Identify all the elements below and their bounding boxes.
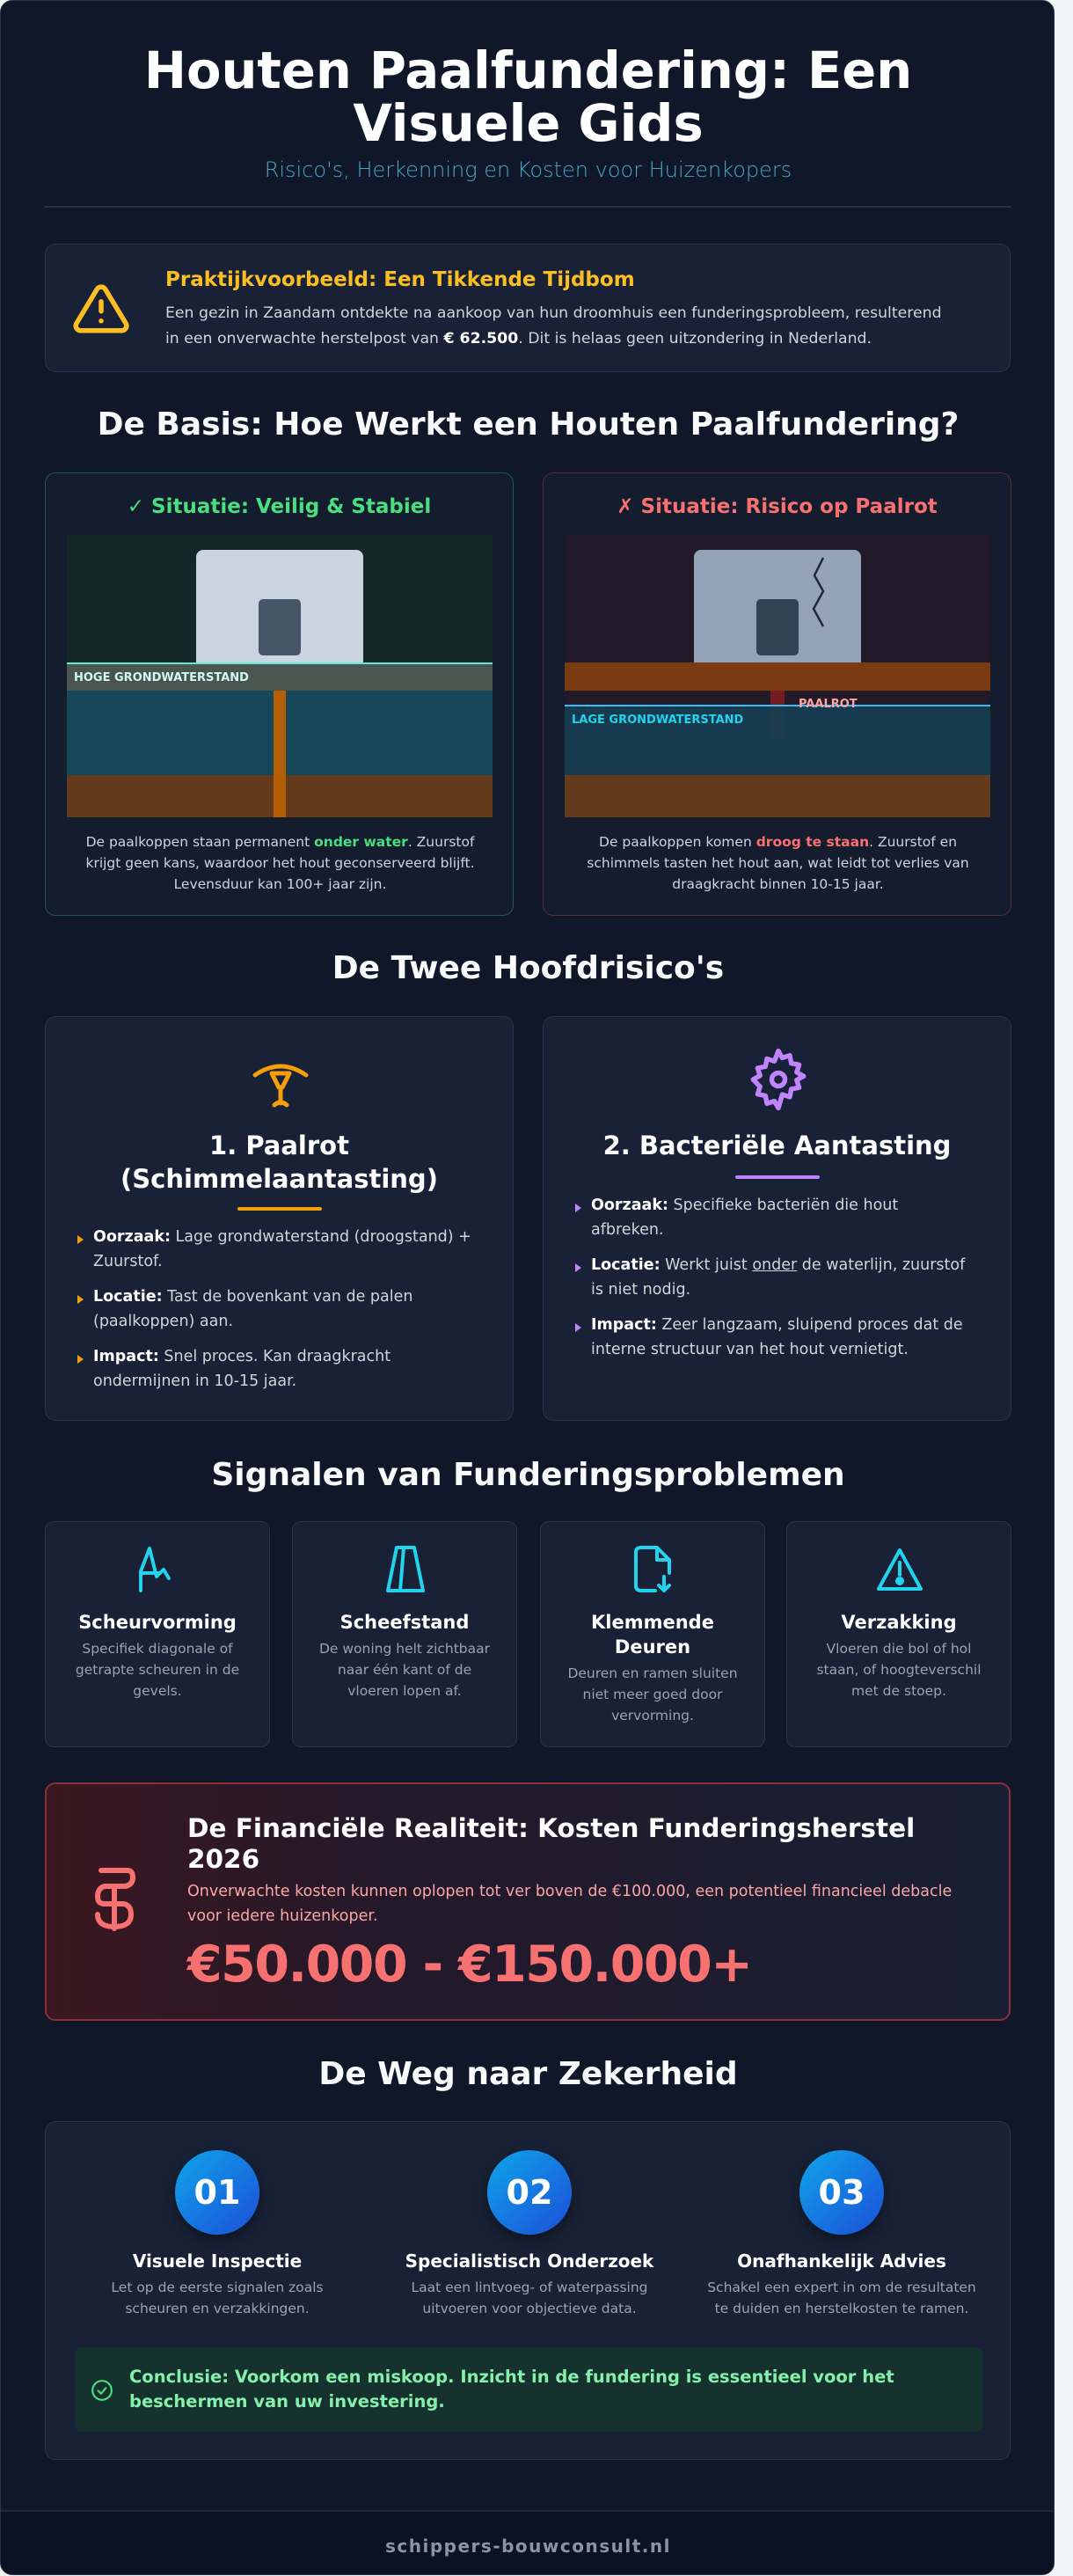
step 1: scheuren en verzakkingen. [125,2301,310,2316]
panel: stappen [45,2121,1011,2460]
step 2 [405,2150,654,2316]
caption: De paalkoppen komen droog te staan. Zuurstof en schimmels tasten het hout aan, wat leidt tot verlies van draagkracht binnen 10-15 jaar. [587,834,969,892]
panel title: ✗ Situatie: Risico op Paalrot [617,495,938,518]
title: Visuele Gids [353,94,704,153]
illustration: high groundwater [67,535,493,817]
callout text [165,304,942,348]
icon: money [95,1868,135,1931]
panel: paalrot [45,1016,514,1421]
step 1: Visuele Inspectie [133,2250,302,2272]
bullet list: Impact: Snel proces. Kan draagkracht ondermijnen in 10-15 jaar. [93,1348,391,1390]
icon: door file [634,1546,672,1592]
financial text: Onverwachte kosten kunnen oplopen tot ver boven de €100.000, een potentieel financieel debacle voor iedere huizenkoper. [187,1883,952,1925]
signal card: scheefstand [292,1521,517,1747]
icon: check [91,2380,113,2401]
signal card: verzakking: Vloeren die bol of hol staan, of hoogteverschil met de stoep. [816,1641,982,1699]
icon: crack [139,1547,171,1592]
conclusion [75,2347,982,2432]
bullet list: Locatie: Tast de bovenkant van de palen (paalkoppen) aan. [93,1288,412,1330]
callout title: Praktijkvoorbeeld: Een Tikkende Tijdbom [165,268,635,291]
caption: De paalkoppen staan permanent onder water. Zuurstof krijgt geen kans, waardoor het hout geconserveerd blijft. Levensduur kan 100+ jaar zijn. [85,834,475,892]
risk title: 1. Paalrot [209,1131,349,1160]
step 1 [111,2150,324,2316]
signal card: scheurvorming: Specifiek diagonale of getrapte scheuren in de gevels. [76,1641,239,1699]
icon: tilted [386,1546,425,1592]
conclusion: Conclusie: Voorkom een miskoop. Inzicht in de fundering is essentieel voor het beschermen van uw investering. [129,2367,894,2411]
signal card: verzakking: Verzakking [841,1612,957,1633]
footer [1,2510,1055,2576]
title: Houten Paalfundering: Een [144,41,912,100]
step 2: 02 [507,2173,552,2212]
bullet list [77,1228,471,1390]
title [144,41,912,153]
footer: schippers-bouwconsult.nl [385,2536,671,2557]
illustration: low groundwater: PAALROT [799,698,858,711]
bullet list: afbreken. [591,1221,664,1239]
callout: praktijkvoorbeeld [45,244,1011,372]
bullet list: Impact: Zeer langzaam, sluipend proces dat de interne structuur van het hout vernietigt. [591,1316,963,1358]
illustration: low groundwater [565,535,990,817]
step 1: Let op de eerste signalen zoals [111,2280,324,2295]
illustration: high groundwater: HOGE GRONDWATERSTAND [74,671,249,684]
subtitle: Risico's, Herkenning en Kosten voor Huizenkopers [265,157,792,182]
bullet list: Oorzaak: Lage grondwaterstand (droogstand) + Zuurstof. [93,1228,471,1270]
risk title: 2. Bacteriële Aantasting [603,1131,951,1160]
signal card: klemmende deuren: Deuren [615,1636,690,1658]
callout text: Een gezin in Zaandam ontdekte na aankoop van hun droomhuis een funderingsprobleem, resulterend [165,304,942,322]
signal card: klemmende deuren: Klemmende [591,1612,714,1633]
icon: warning [877,1548,923,1591]
signal card: verzakking [786,1521,1011,1747]
risk title: (Schimmelaantasting) [120,1164,438,1194]
bullet list: Oorzaak: Specifieke bacteriën die hout [591,1197,898,1214]
bullet list [575,1197,966,1358]
heading: de basis: De Basis: Hoe Werkt een Houten Paalfundering? [98,406,959,443]
financial title: De Financiële Realiteit: Kosten Funderingsherstel 2026 [187,1813,915,1874]
step 3: te duiden en herstelkosten te ramen. [715,2301,968,2316]
signal card: scheurvorming: Scheurvorming [78,1612,237,1633]
step 2: uitvoeren voor objectieve data. [422,2301,637,2316]
panel: veilig [45,472,514,916]
signal card: scheefstand: De woning helt zichtbaar naar één kant of de vloeren lopen af. [319,1641,490,1699]
callout text: in een onverwachte herstelpost van € 62.500. Dit is helaas geen uitzondering in Nederland. [165,330,872,348]
step 3: Onafhankelijk Advies [737,2250,946,2272]
heading: weg naar zekerheid: De Weg naar Zekerheid [318,2056,738,2092]
big cost figure: €50.000 - €150.000+ [187,1936,752,1994]
callout: financiele realiteit [45,1782,1011,2021]
step 2: Laat een lintvoeg- of waterpassing [411,2280,647,2295]
step 3: Schakel een expert in om de resultaten [707,2280,976,2295]
icon: gear [751,1049,806,1110]
signal card: klemmende deuren: Deuren en ramen sluiten niet meer goed door vervorming. [567,1665,738,1723]
heading: hoofdrisico's: De Twee Hoofdrisico's [332,950,724,986]
step 3: 03 [819,2173,865,2212]
signal card: scheefstand: Scheefstand [340,1612,469,1633]
risk title [120,1131,438,1194]
panel: risico [543,472,1011,916]
bullet list: Locatie: Werkt juist onder de waterlijn, zuurstof is niet nodig. [591,1256,965,1299]
illustration: low groundwater: LAGE GRONDWATERSTAND [572,714,744,727]
icon: pickaxe [253,1065,308,1107]
signal card: scheurvorming [45,1521,270,1747]
panel: bacteriele aantasting [543,1016,1011,1421]
heading: signalen: Signalen van Funderingsproblemen [211,1457,845,1493]
step 2: Specialistisch Onderzoek [405,2250,653,2272]
step 1: 01 [194,2173,240,2212]
step 3 [707,2150,976,2316]
panel title: ✓ Situatie: Veilig & Stabiel [128,495,431,518]
signal card: klemmende deuren [540,1521,765,1747]
icon: warning [73,284,129,333]
